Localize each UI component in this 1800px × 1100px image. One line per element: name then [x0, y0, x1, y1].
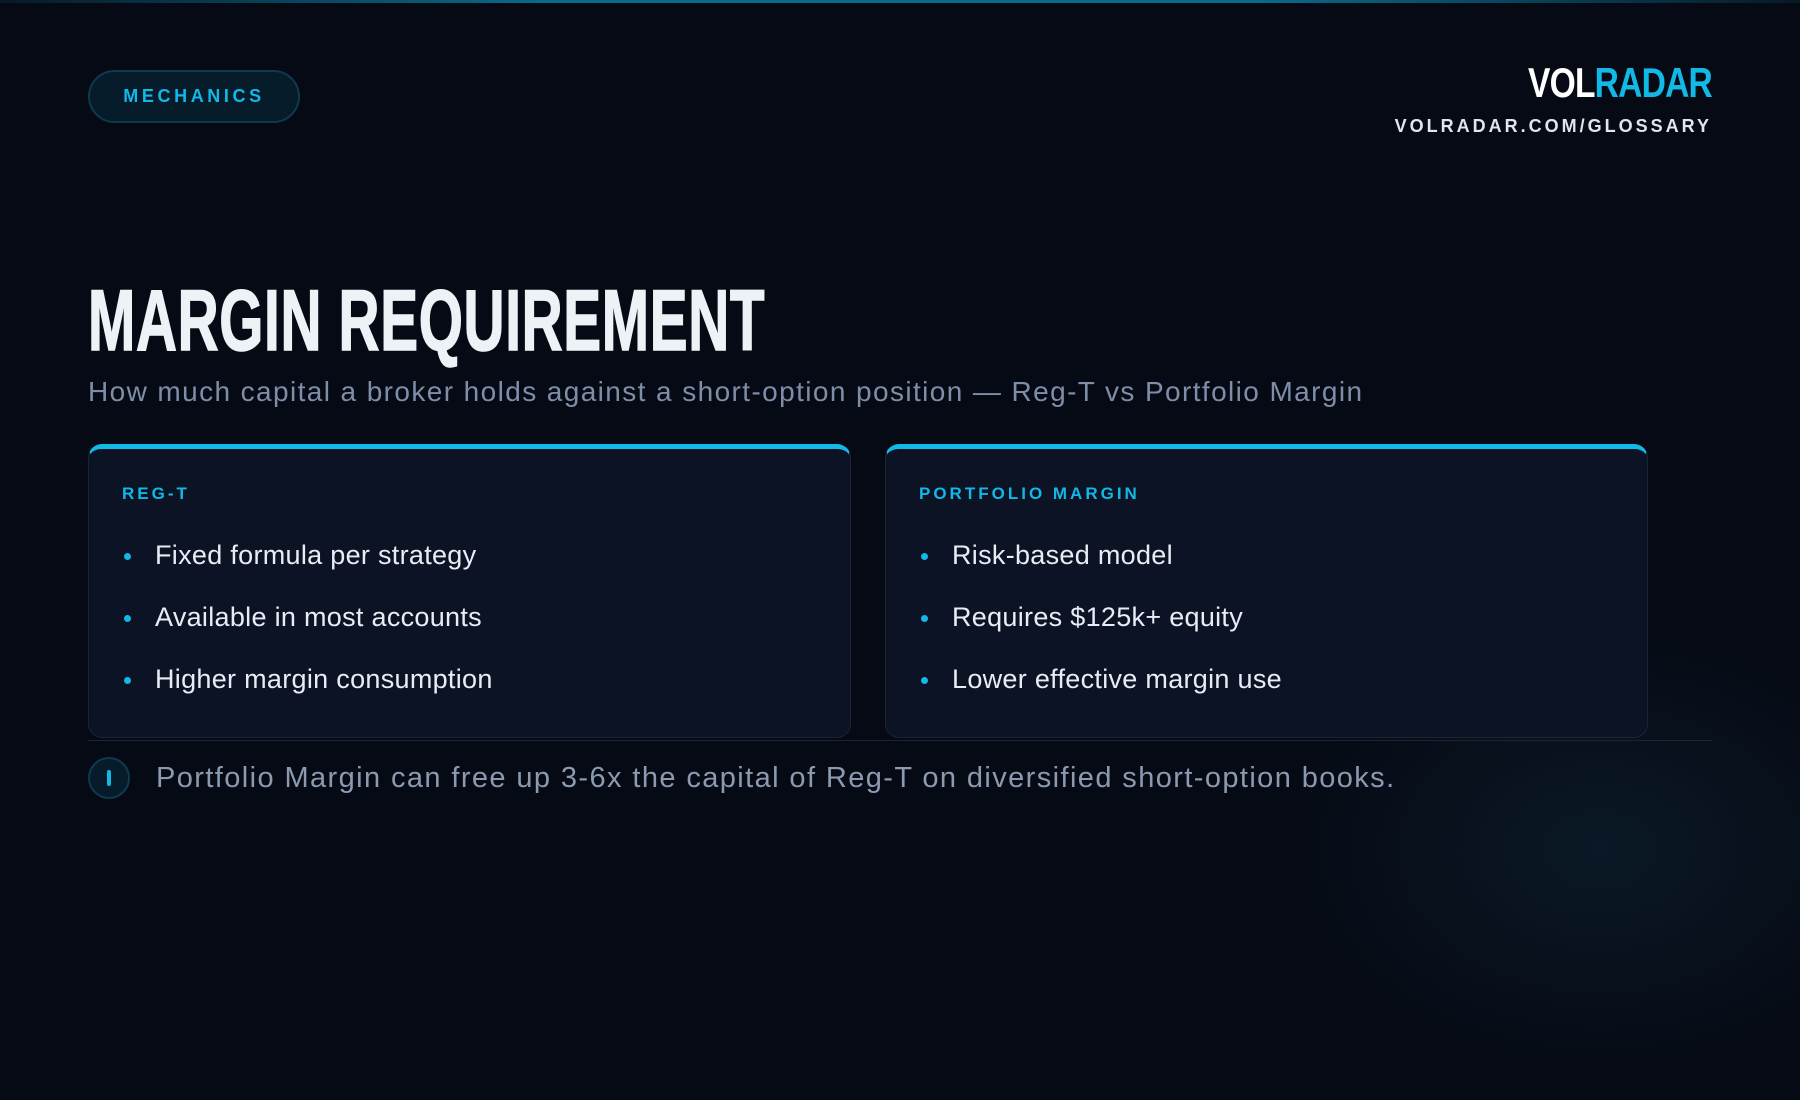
title: MARGIN REQUIREMENT	[88, 273, 765, 369]
bullet list: Risk-based model	[952, 540, 1173, 570]
panel label: REG-T	[122, 484, 190, 503]
panel: Portfolio Margin	[885, 444, 1648, 738]
panel label: PORTFOLIO MARGIN	[919, 484, 1140, 503]
category pill	[88, 70, 300, 123]
bullet list: Higher margin consumption	[155, 664, 493, 694]
brand logo: VOLRADAR.COM/GLOSSARY	[1395, 116, 1712, 136]
bullet list	[921, 540, 1282, 694]
brand logo	[1394, 59, 1712, 136]
callout note: Portfolio Margin can free up 3-6x the capital of Reg-T on diversified short-option books.	[156, 762, 1396, 794]
icon: info	[88, 757, 130, 799]
bullet list	[124, 540, 493, 694]
bullet list: Lower effective margin use	[952, 664, 1282, 694]
subtitle: How much capital a broker holds against a short-option position — Reg-T vs Portfolio Margin	[88, 376, 1363, 407]
category pill: MECHANICS	[123, 86, 265, 106]
bullet list: Requires $125k+ equity	[952, 602, 1243, 632]
brand logo: VOLRADAR	[1528, 59, 1712, 106]
bullet list: Available in most accounts	[155, 602, 482, 632]
panel: Reg-T	[88, 444, 851, 738]
bullet list: Fixed formula per strategy	[155, 540, 476, 570]
